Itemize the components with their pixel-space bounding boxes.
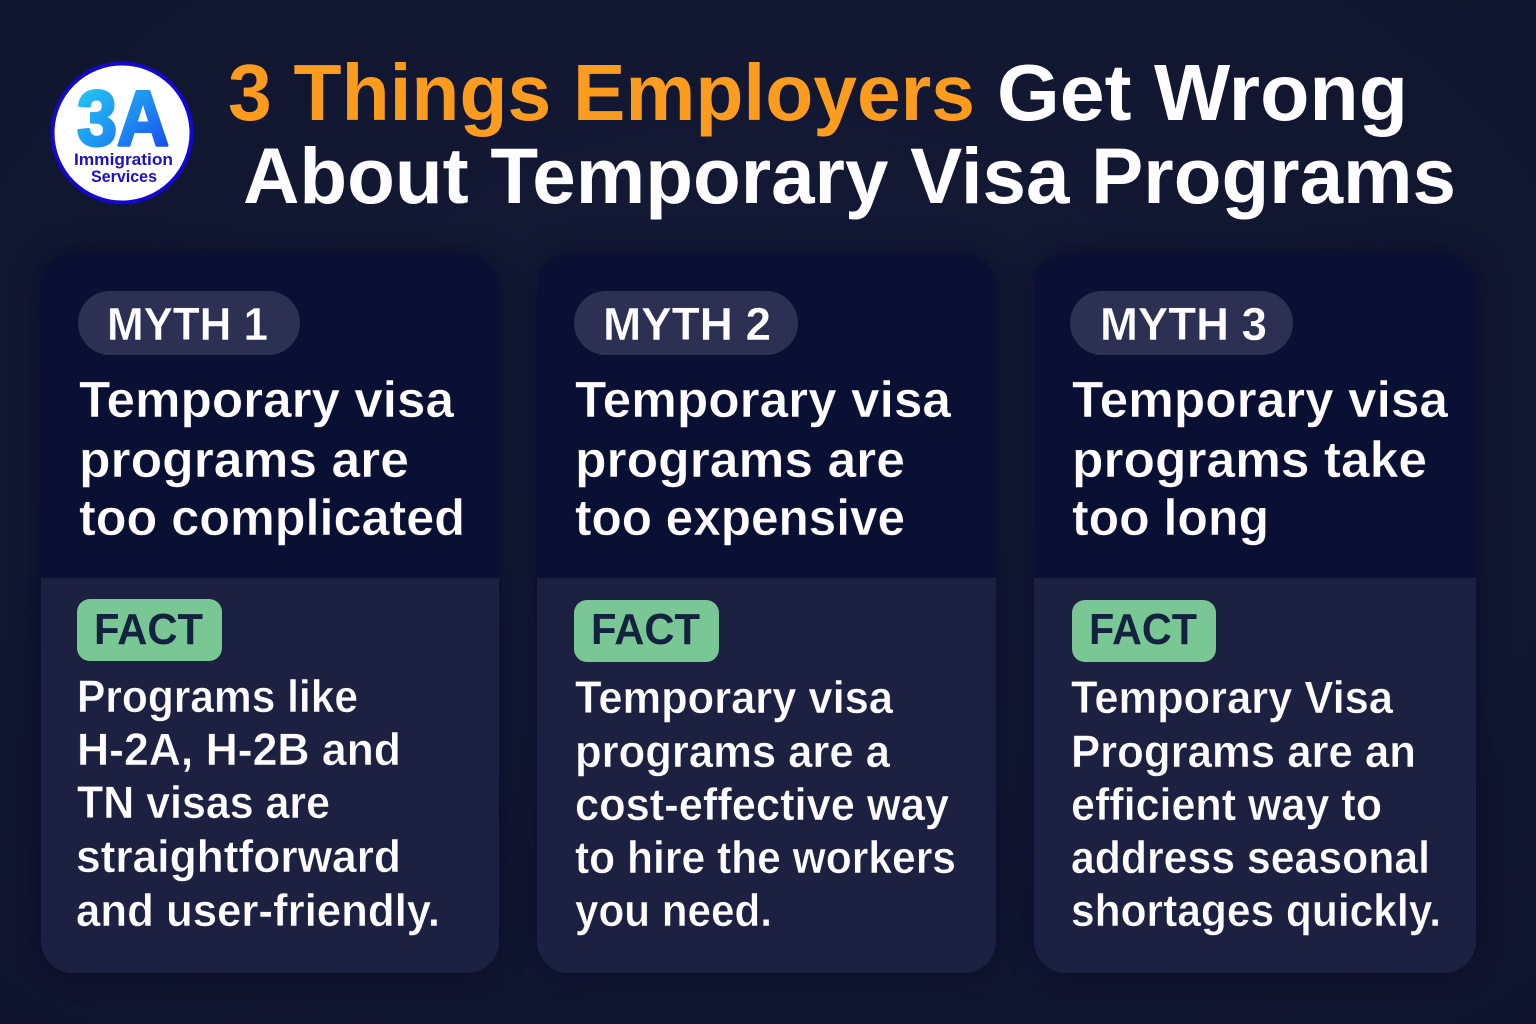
myth 3 statement: Temporary visa <box>1072 371 1449 428</box>
title: Get Wrong <box>997 48 1408 137</box>
logo: 3A Immigration Services: Immigration <box>74 150 173 169</box>
fact 1 text <box>76 671 440 936</box>
myth 2 statement: too expensive <box>575 489 905 546</box>
fact 1 text: straightforward <box>76 831 401 882</box>
myth 3 badge <box>1070 291 1293 355</box>
fact 2 text: you need. <box>575 885 772 936</box>
fact 1 badge: FACT <box>94 605 203 654</box>
myth 2 statement <box>575 371 952 546</box>
myth 1 statement: Temporary visa <box>79 371 455 428</box>
fact 3 text: shortages quickly. <box>1071 885 1441 936</box>
fact 3 text: Programs are an <box>1071 726 1416 777</box>
fact 1 text: H-2A, H-2B and <box>77 724 401 775</box>
panel: myth 3 <box>1034 254 1476 973</box>
panel: myth 2 <box>537 254 996 973</box>
logo: 3A Immigration Services <box>52 64 192 202</box>
fact 2 text: Temporary visa <box>575 672 894 723</box>
myth 3 statement: programs take <box>1072 431 1427 488</box>
fact 3 text: address seasonal <box>1071 832 1430 883</box>
fact 2 text <box>575 672 956 936</box>
fact 2 text: to hire the workers <box>575 832 956 883</box>
fact 2 badge <box>574 600 719 662</box>
myth 2 badge <box>574 291 798 355</box>
myth 2 statement: Temporary visa <box>575 371 952 428</box>
fact 3 text: Temporary Visa <box>1071 672 1394 723</box>
logo: 3A Immigration Services: Services <box>91 167 157 186</box>
logo: 3A Immigration Services: 3A <box>77 74 169 162</box>
fact 3 badge <box>1072 600 1216 662</box>
fact 1 text: Programs like <box>77 671 358 722</box>
title <box>228 48 1456 220</box>
myth 3 statement: too long <box>1072 489 1269 546</box>
panel: myth 1 <box>41 254 499 973</box>
myth 1 statement: too complicated <box>79 489 465 546</box>
fact 1 text: TN visas are <box>77 777 330 828</box>
title: 3 Things Employers <box>228 48 975 137</box>
myth 1 badge: MYTH 1 <box>107 298 268 350</box>
fact 1 text: and user-friendly. <box>76 885 440 936</box>
title: About Temporary Visa Programs <box>243 131 1456 220</box>
myth 3 badge: MYTH 3 <box>1100 298 1267 350</box>
myth 2 statement: programs are <box>575 431 905 488</box>
myth 1 badge <box>78 291 300 355</box>
myth 1 statement <box>79 371 465 546</box>
fact 3 text: efficient way to <box>1071 779 1382 830</box>
fact 2 text: cost-effective way <box>575 779 949 830</box>
myth 2 badge: MYTH 2 <box>603 298 771 350</box>
fact 2 badge: FACT <box>591 605 700 654</box>
myth 1 statement: programs are <box>79 431 409 488</box>
fact 2 text: programs are a <box>575 726 891 777</box>
fact 3 text <box>1071 672 1441 936</box>
fact 3 badge: FACT <box>1089 605 1197 654</box>
myth 3 statement <box>1072 371 1449 546</box>
fact 1 badge <box>77 599 222 661</box>
